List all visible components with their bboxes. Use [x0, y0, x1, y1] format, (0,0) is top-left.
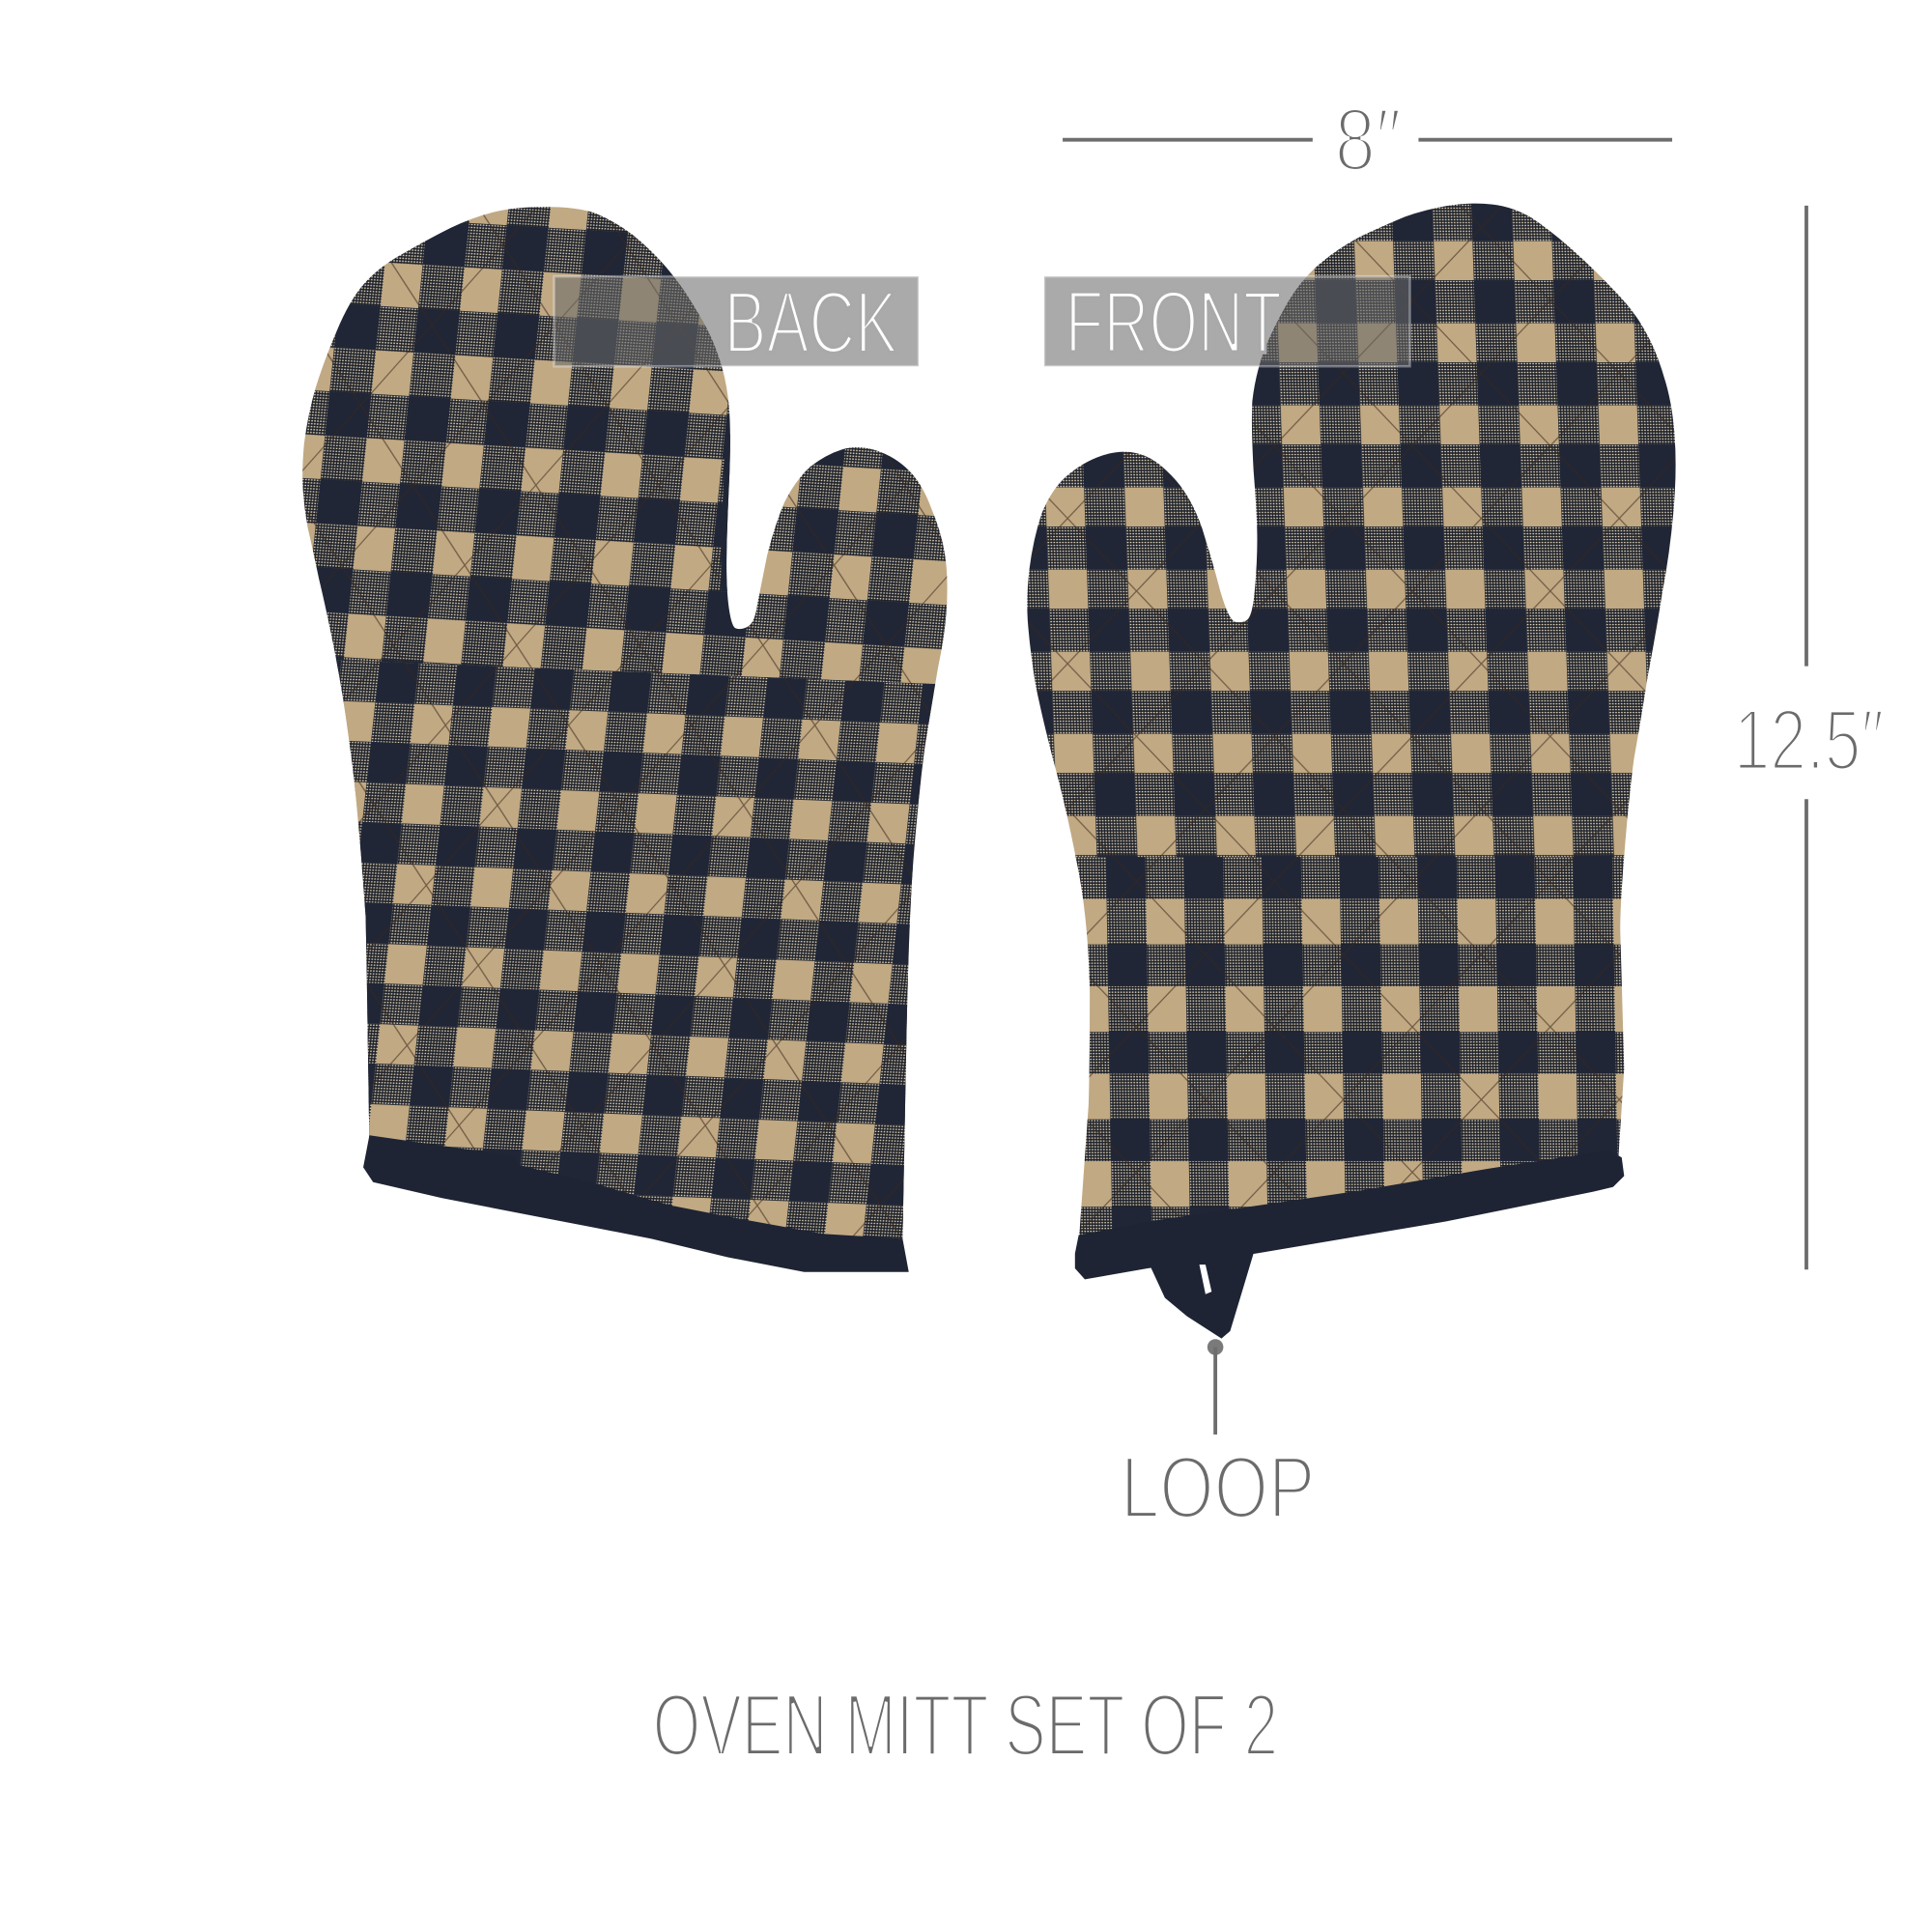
label: BACK [554, 274, 919, 372]
height dimension: 12.5 inches: 12.5″ [1734, 692, 1884, 788]
width dimension: 8 inches: 8″ [1335, 91, 1402, 189]
left mitt gingham fabric [302, 207, 948, 1239]
title: OVEN MITT SET OF 2 [653, 1677, 1278, 1775]
right mitt: front [1009, 185, 1699, 1339]
label: FRONT: FRONT [1065, 274, 1282, 372]
right mitt gingham fabric [1009, 185, 1699, 1256]
right mitt cuff [1075, 1151, 1624, 1279]
left mitt cuff [363, 1135, 909, 1272]
callout: loop: LOOP [1121, 1439, 1315, 1537]
label: BACK: BACK [724, 274, 897, 372]
left mitt: back [302, 207, 948, 1272]
callout: loop [1121, 1339, 1315, 1537]
hanging loop [1151, 1254, 1254, 1339]
